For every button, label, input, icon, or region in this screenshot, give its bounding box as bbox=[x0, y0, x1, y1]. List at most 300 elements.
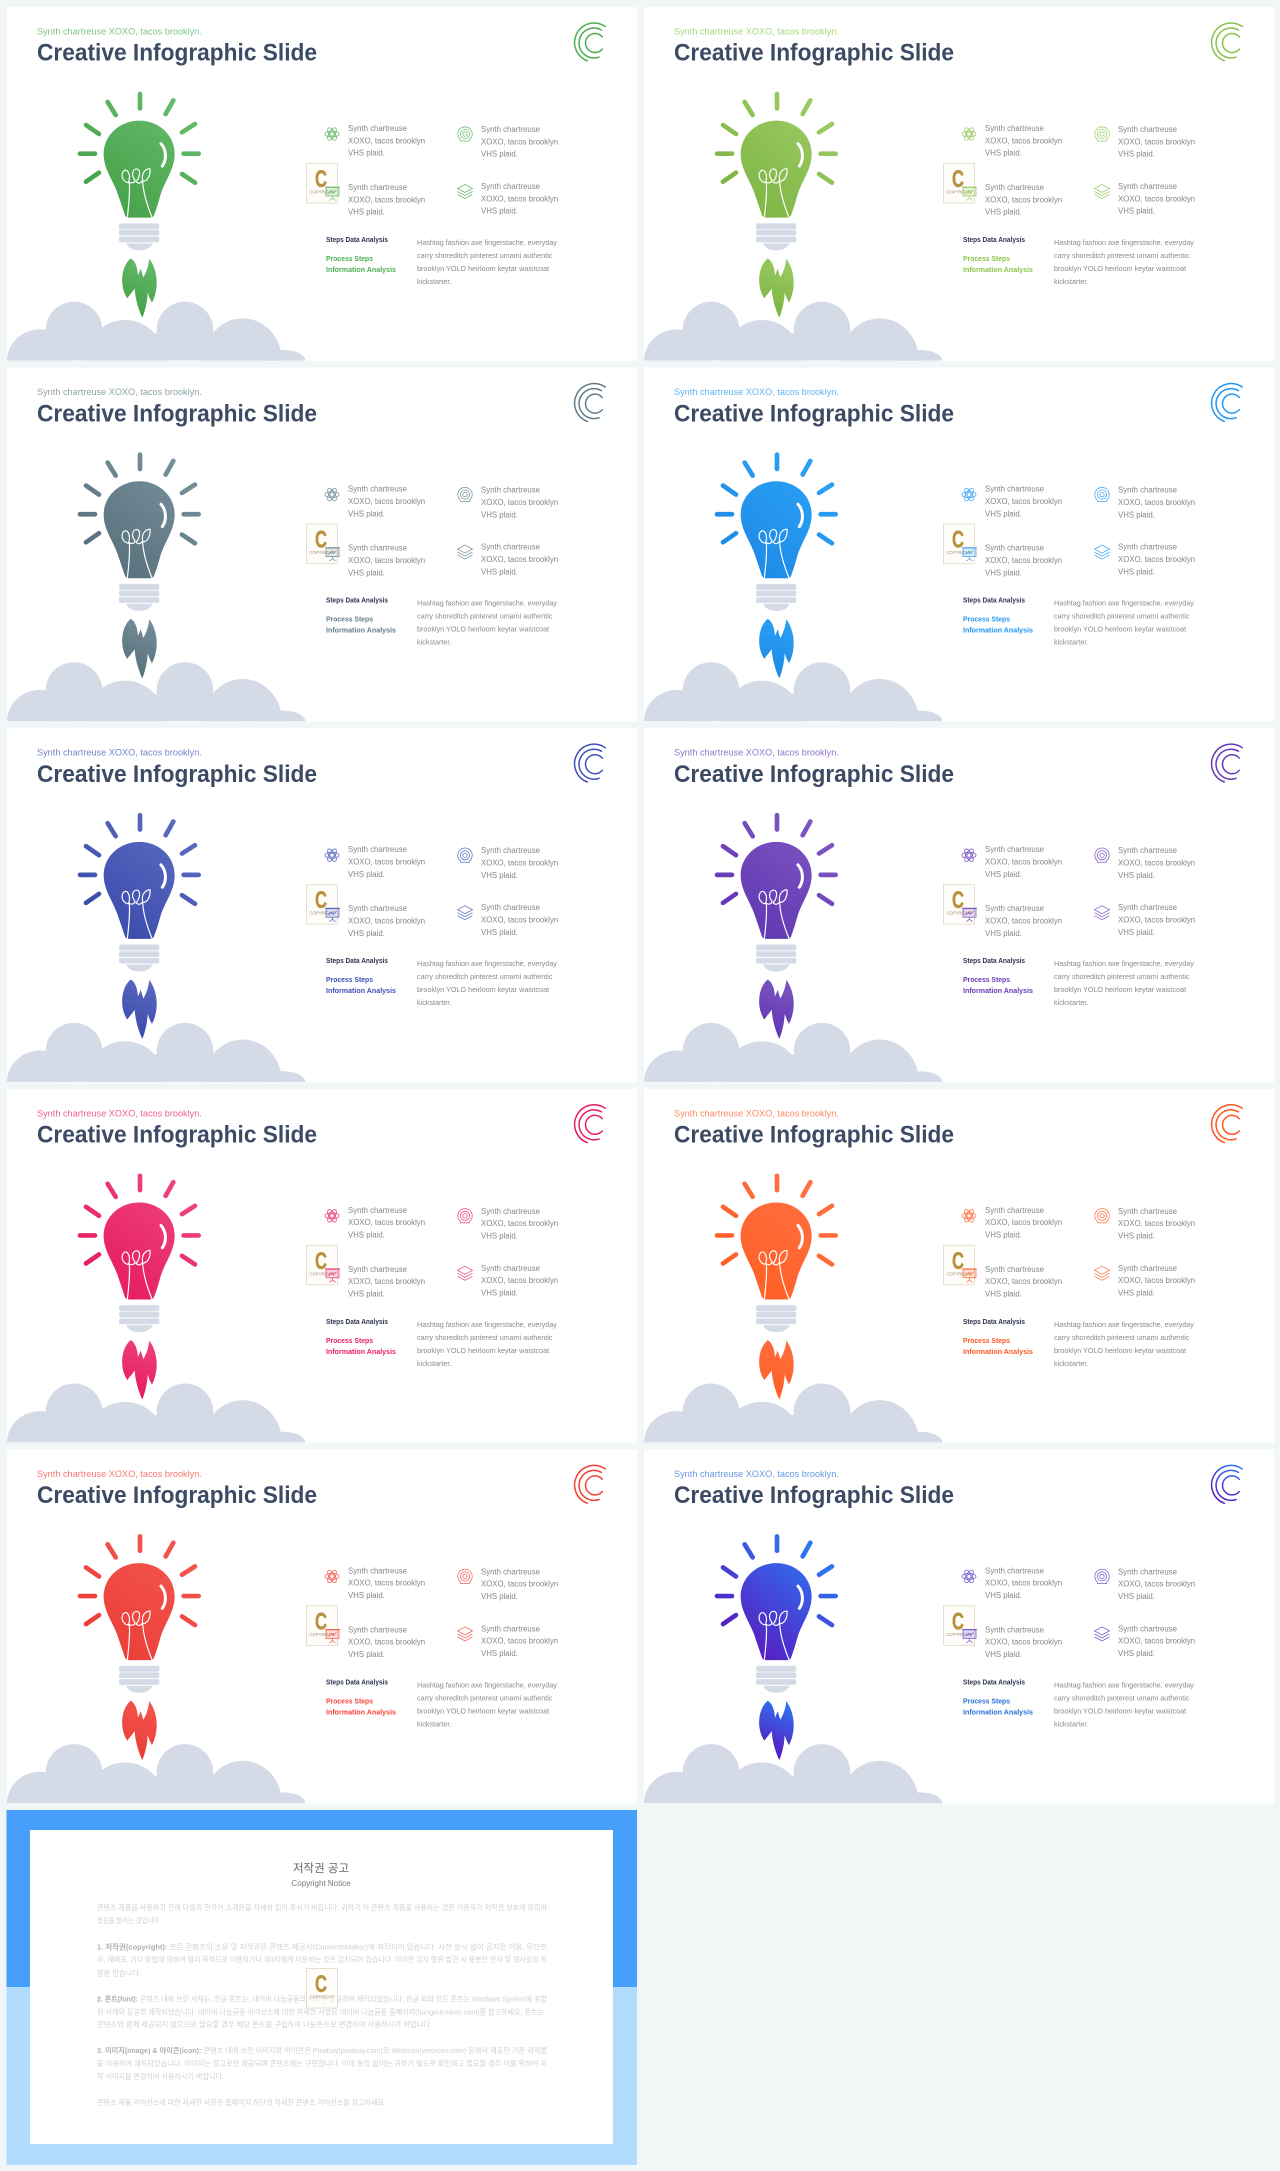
feature text 3: VHS plaid. bbox=[985, 568, 1022, 577]
subtitle: Synth chartreuse XOXO, tacos brooklyn. bbox=[674, 26, 839, 36]
slide 4: blue bbox=[644, 368, 1274, 764]
feature text 4: VHS plaid. bbox=[481, 1289, 518, 1298]
title: Creative Infographic Slide bbox=[37, 1122, 317, 1149]
panel: copyright notice slide bbox=[6, 1810, 637, 2165]
notice closing line: 콘텐츠 제품 라이선스에 대한 자세한 사항은 홈페이지 하단의 자세한 콘텐츠 라이선스를 참고하세요. bbox=[97, 2098, 386, 2107]
rocket light bulb illustration bbox=[7, 94, 305, 403]
feature text 1: Synth chartreuse bbox=[348, 845, 407, 854]
description paragraph: kickstarter. bbox=[417, 1359, 451, 1368]
notice white card bbox=[30, 1830, 613, 2144]
feature text 2: XOXO, tacos brooklyn bbox=[1118, 137, 1195, 146]
feature text 2: VHS plaid. bbox=[481, 871, 518, 880]
description paragraph: brooklyn YOLO heirloom keytar waistcoat bbox=[1054, 1706, 1186, 1715]
icon: layers bbox=[1094, 1266, 1110, 1280]
label: steps data analysis: Steps Data Analysis bbox=[963, 235, 1025, 244]
bulb screw base bbox=[119, 1666, 159, 1693]
notice section 1: copyright bbox=[97, 1942, 547, 1978]
feature text 3: XOXO, tacos brooklyn bbox=[985, 195, 1062, 204]
watermark stamp: COPYRIGHT bbox=[946, 911, 972, 916]
rocket flame bbox=[759, 1340, 794, 1399]
feature text 3: Synth chartreuse bbox=[985, 183, 1044, 192]
description paragraph: carry shoreditch pinterest umami authentic bbox=[1054, 251, 1190, 260]
feature text 2: XOXO, tacos brooklyn bbox=[481, 1219, 558, 1228]
description paragraph: kickstarter. bbox=[1054, 1359, 1088, 1368]
feature text 3: XOXO, tacos brooklyn bbox=[348, 917, 425, 926]
feature text 3: Synth chartreuse bbox=[348, 904, 407, 913]
icon: circular logo bbox=[575, 744, 605, 782]
description paragraph: kickstarter. bbox=[417, 277, 451, 286]
bulb screw base bbox=[119, 1305, 159, 1332]
icon: layers bbox=[1094, 184, 1110, 198]
description paragraph: brooklyn YOLO heirloom keytar waistcoat bbox=[1054, 625, 1186, 634]
filament and highlight bbox=[759, 865, 802, 939]
notice section 3: image and icon: 3. 이미지(image) & 아이콘(icon): 콘텐츠 내에 쓰인 이미지와 아이콘은 Pixabay(pixabay.com)와 Webicon(webicon.com) 등에서 제공한 기준 저작물 bbox=[97, 2046, 547, 2055]
feature text 3: VHS plaid. bbox=[985, 208, 1022, 217]
description paragraph: Hashtag fashion axe fingerstache, everyday bbox=[1054, 238, 1194, 247]
description paragraph: Hashtag fashion axe fingerstache, everyday bbox=[417, 238, 557, 247]
feature text 2: XOXO, tacos brooklyn bbox=[1118, 498, 1195, 507]
smoke cloud bbox=[644, 662, 942, 764]
slide 7: pink bbox=[7, 1089, 637, 1485]
feature text 2: XOXO, tacos brooklyn bbox=[481, 859, 558, 868]
rocket light bulb illustration bbox=[7, 455, 305, 764]
subtitle: Synth chartreuse XOXO, tacos brooklyn. bbox=[37, 1108, 202, 1118]
feature text 4: XOXO, tacos brooklyn bbox=[1118, 1637, 1195, 1646]
label: process steps: Process Steps bbox=[326, 1696, 373, 1705]
icon: atom bbox=[325, 487, 339, 502]
label: process steps: Process Steps bbox=[326, 254, 373, 263]
feature text 3: VHS plaid. bbox=[985, 1650, 1022, 1659]
icon: target bbox=[1095, 1569, 1109, 1583]
title: Creative Infographic Slide bbox=[674, 761, 954, 788]
feature text 4: XOXO, tacos brooklyn bbox=[481, 1276, 558, 1285]
feature text 1: VHS plaid. bbox=[985, 870, 1022, 879]
feature text 1: XOXO, tacos brooklyn bbox=[985, 1579, 1062, 1588]
feature text 3: Synth chartreuse bbox=[985, 904, 1044, 913]
feature text 1: XOXO, tacos brooklyn bbox=[985, 858, 1062, 867]
subtitle: Synth chartreuse XOXO, tacos brooklyn. bbox=[674, 748, 839, 758]
rocket light bulb illustration bbox=[644, 815, 942, 1124]
feature text 4: VHS plaid. bbox=[1118, 567, 1155, 576]
bulb screw base bbox=[756, 584, 796, 611]
feature text 3: VHS plaid. bbox=[985, 929, 1022, 938]
feature text 2: VHS plaid. bbox=[481, 150, 518, 159]
label: process steps: Process Steps bbox=[963, 254, 1010, 263]
title: Creative Infographic Slide bbox=[37, 400, 317, 427]
feature text 3: XOXO, tacos brooklyn bbox=[348, 556, 425, 565]
feature text 1: Synth chartreuse bbox=[348, 1206, 407, 1215]
watermark stamp bbox=[306, 1968, 338, 2008]
notice background bottom band bbox=[6, 1987, 637, 2165]
subtitle: Synth chartreuse XOXO, tacos brooklyn. bbox=[37, 748, 202, 758]
slide 1: green bbox=[7, 7, 637, 403]
icon: circular logo bbox=[575, 1465, 605, 1503]
feature text 4: VHS plaid. bbox=[481, 928, 518, 937]
feature text 3: VHS plaid. bbox=[348, 929, 385, 938]
label: process steps: Process Steps bbox=[963, 615, 1010, 624]
label: steps data analysis: Steps Data Analysis bbox=[963, 956, 1025, 965]
watermark stamp: COPYRIGHT bbox=[946, 550, 972, 555]
slide 6: purple bbox=[644, 728, 1274, 1124]
icon: circular logo bbox=[1212, 744, 1242, 782]
light rays bbox=[717, 1176, 836, 1264]
notice section 2: font: 콘텐츠와 함께 제공되지 않으므로 필요할 경우 해당 폰트를 구입하여 나눔폰트로 변경하여 사용하시기 바랍니다. bbox=[97, 2020, 432, 2029]
smoke cloud bbox=[644, 1744, 942, 1845]
feature text 1: VHS plaid. bbox=[348, 1591, 385, 1600]
feature text 4: Synth chartreuse bbox=[481, 543, 540, 552]
description paragraph: Hashtag fashion axe fingerstache, everyday bbox=[417, 1680, 557, 1689]
description paragraph: Hashtag fashion axe fingerstache, everyday bbox=[1054, 1320, 1194, 1329]
feature text 3: VHS plaid. bbox=[348, 568, 385, 577]
icon: target bbox=[1095, 127, 1109, 141]
label: steps data analysis: Steps Data Analysis bbox=[326, 956, 388, 965]
feature text 4: Synth chartreuse bbox=[481, 1264, 540, 1273]
rocket light bulb illustration bbox=[7, 1176, 305, 1485]
notice intro paragraph: 셨음을 알리는 것입니다. bbox=[97, 1916, 161, 1925]
description paragraph: Hashtag fashion axe fingerstache, everyday bbox=[417, 959, 557, 968]
label: steps data analysis: Steps Data Analysis bbox=[326, 235, 388, 244]
icon: circular logo bbox=[575, 384, 605, 421]
filament and highlight bbox=[759, 504, 802, 578]
light rays bbox=[80, 815, 199, 904]
icon: circular logo bbox=[1212, 1105, 1242, 1143]
description paragraph: kickstarter. bbox=[417, 638, 451, 647]
icon: presentation board bbox=[325, 908, 340, 922]
label: information analysis: Information Analysis bbox=[963, 626, 1033, 635]
feature text 4: VHS plaid. bbox=[481, 1649, 518, 1658]
panel background bbox=[7, 7, 637, 361]
watermark stamp: COPYRIGHT bbox=[946, 1632, 972, 1637]
watermark stamp: COPYRIGHT bbox=[310, 550, 335, 555]
bulb screw base bbox=[756, 223, 796, 250]
description paragraph: Hashtag fashion axe fingerstache, everyday bbox=[1054, 959, 1194, 968]
notice intro paragraph bbox=[97, 1903, 547, 1925]
bulb glass bbox=[104, 1202, 175, 1299]
label: steps data analysis: Steps Data Analysis bbox=[326, 1677, 388, 1686]
feature text 1: Synth chartreuse bbox=[985, 1566, 1044, 1575]
feature text 4: XOXO, tacos brooklyn bbox=[481, 1637, 558, 1646]
feature text 4: VHS plaid. bbox=[1118, 1289, 1155, 1298]
description paragraph: brooklyn YOLO heirloom keytar waistcoat bbox=[1054, 1346, 1186, 1355]
label: process steps: Process Steps bbox=[326, 975, 373, 984]
bulb glass bbox=[104, 481, 175, 578]
notice intro paragraph: 콘텐츠 제품을 사용하기 전에 다음의 한국어 소개문을 자세히 읽어 주시기 바랍니다. 귀하가 이 콘텐츠 제품을 사용하는 것은 이용자가 저작권 보호에 유의하 bbox=[97, 1903, 547, 1912]
feature text 3: Synth chartreuse bbox=[985, 1265, 1044, 1274]
feature text 4: XOXO, tacos brooklyn bbox=[481, 555, 558, 564]
feature text 4: Synth chartreuse bbox=[481, 903, 540, 912]
filament and highlight bbox=[122, 1586, 165, 1660]
feature text 2: Synth chartreuse bbox=[1118, 846, 1177, 855]
filament and highlight bbox=[122, 504, 165, 578]
feature text 3: XOXO, tacos brooklyn bbox=[348, 1638, 425, 1647]
icon: presentation board bbox=[962, 187, 977, 200]
label: process steps: Process Steps bbox=[963, 1696, 1010, 1705]
icon: target bbox=[458, 1209, 472, 1223]
title: Creative Infographic Slide bbox=[37, 40, 317, 67]
light rays bbox=[80, 1536, 199, 1625]
panel background bbox=[7, 728, 637, 1082]
description paragraph: brooklyn YOLO heirloom keytar waistcoat bbox=[1054, 985, 1186, 994]
feature text 1: VHS plaid. bbox=[985, 1591, 1022, 1600]
notice subheading: Copyright Notice bbox=[291, 1879, 351, 1888]
title: Creative Infographic Slide bbox=[674, 1122, 954, 1149]
description paragraph: carry shoreditch pinterest umami authentic bbox=[417, 251, 553, 260]
subtitle: Synth chartreuse XOXO, tacos brooklyn. bbox=[37, 26, 202, 36]
rocket light bulb illustration bbox=[644, 1536, 942, 1845]
subtitle: Synth chartreuse XOXO, tacos brooklyn. bbox=[674, 1108, 839, 1118]
feature text 4: Synth chartreuse bbox=[1118, 543, 1177, 552]
label: information analysis: Information Analysis bbox=[963, 986, 1033, 995]
bulb screw base bbox=[756, 945, 796, 972]
notice section 2: font bbox=[97, 1994, 547, 2029]
panel background bbox=[7, 1089, 637, 1443]
watermark stamp: COPYRIGHT bbox=[310, 190, 335, 194]
bulb screw base bbox=[756, 1305, 796, 1332]
smoke cloud bbox=[7, 302, 305, 403]
rocket flame bbox=[759, 258, 794, 318]
description paragraph: brooklyn YOLO heirloom keytar waistcoat bbox=[417, 985, 549, 994]
feature text 2: VHS plaid. bbox=[1118, 150, 1155, 159]
icon: layers bbox=[1094, 1627, 1110, 1641]
rocket flame bbox=[122, 1701, 157, 1760]
panel background bbox=[7, 1449, 637, 1803]
description paragraph: brooklyn YOLO heirloom keytar waistcoat bbox=[417, 1346, 549, 1355]
subtitle: Synth chartreuse XOXO, tacos brooklyn. bbox=[674, 387, 839, 397]
label: information analysis: Information Analysis bbox=[326, 1347, 396, 1356]
subtitle: Synth chartreuse XOXO, tacos brooklyn. bbox=[674, 1469, 839, 1479]
feature text 3: VHS plaid. bbox=[985, 1290, 1022, 1299]
light rays bbox=[717, 455, 836, 543]
description paragraph: carry shoreditch pinterest umami authentic bbox=[417, 972, 553, 981]
label: process steps: Process Steps bbox=[963, 1336, 1010, 1345]
feature text 2: VHS plaid. bbox=[481, 510, 518, 519]
slide 2: light green bbox=[644, 7, 1274, 403]
label: information analysis: Information Analysis bbox=[326, 986, 396, 995]
description paragraph: kickstarter. bbox=[1054, 1719, 1088, 1728]
icon: circular logo bbox=[1212, 1465, 1242, 1503]
description paragraph: Hashtag fashion axe fingerstache, everyday bbox=[417, 1320, 557, 1329]
feature text 2: Synth chartreuse bbox=[481, 1207, 540, 1216]
feature text 2: VHS plaid. bbox=[1118, 871, 1155, 880]
label: process steps: Process Steps bbox=[326, 1336, 373, 1345]
bulb glass bbox=[104, 121, 175, 218]
icon: presentation board bbox=[962, 1269, 977, 1282]
feature text 1: XOXO, tacos brooklyn bbox=[348, 1579, 425, 1588]
notice section 2: font: 2. 폰트(font): 콘텐츠 내에 쓰인 서체는, 한글 폰트는, 네이버 나눔글꼴의 서체를 활용하여 제작되었습니다. 한글 외의 모든 폰트는 Windows System에 포함 bbox=[97, 1994, 547, 2004]
watermark stamp: C bbox=[952, 166, 964, 193]
feature text 4: XOXO, tacos brooklyn bbox=[481, 194, 558, 203]
feature text 3: XOXO, tacos brooklyn bbox=[985, 1277, 1062, 1286]
bulb glass bbox=[741, 842, 812, 939]
feature text 4: XOXO, tacos brooklyn bbox=[1118, 555, 1195, 564]
icon: presentation board bbox=[962, 908, 977, 922]
bulb glass bbox=[741, 1563, 812, 1660]
panel background bbox=[644, 368, 1274, 722]
watermark stamp bbox=[306, 885, 338, 924]
smoke cloud bbox=[644, 302, 942, 403]
watermark stamp: C bbox=[315, 1248, 327, 1275]
icon: target bbox=[458, 487, 472, 502]
feature text 4: Synth chartreuse bbox=[1118, 182, 1177, 191]
feature text 4: Synth chartreuse bbox=[481, 182, 540, 191]
watermark stamp bbox=[944, 1606, 974, 1645]
description paragraph: Hashtag fashion axe fingerstache, everyday bbox=[417, 599, 557, 608]
bulb glass bbox=[104, 842, 175, 939]
feature text 3: VHS plaid. bbox=[348, 1290, 385, 1299]
icon: layers bbox=[1094, 545, 1110, 559]
feature text 2: VHS plaid. bbox=[1118, 1232, 1155, 1241]
feature text 4: VHS plaid. bbox=[1118, 928, 1155, 937]
rocket flame bbox=[122, 619, 157, 678]
smoke cloud bbox=[644, 1023, 942, 1124]
feature text 2: Synth chartreuse bbox=[481, 846, 540, 855]
icon: circular logo bbox=[1212, 384, 1242, 421]
feature text 2: Synth chartreuse bbox=[481, 1567, 540, 1576]
feature text 1: VHS plaid. bbox=[348, 870, 385, 879]
feature text 2: XOXO, tacos brooklyn bbox=[1118, 1580, 1195, 1589]
feature text 3: Synth chartreuse bbox=[348, 1625, 407, 1634]
feature text 2: XOXO, tacos brooklyn bbox=[1118, 859, 1195, 868]
icon: circular logo bbox=[1212, 23, 1242, 61]
bulb glass bbox=[741, 121, 812, 218]
label: steps data analysis: Steps Data Analysis bbox=[963, 1677, 1025, 1686]
bulb glass bbox=[104, 1563, 175, 1660]
light rays bbox=[717, 815, 836, 904]
icon: atom bbox=[962, 487, 976, 502]
filament and highlight bbox=[759, 1225, 802, 1299]
feature text 1: Synth chartreuse bbox=[348, 485, 407, 494]
icon: layers bbox=[458, 545, 472, 559]
light rays bbox=[80, 455, 199, 543]
feature text 3: XOXO, tacos brooklyn bbox=[348, 1277, 425, 1286]
rocket flame bbox=[122, 258, 157, 318]
icon: atom bbox=[962, 1569, 976, 1584]
notice section 1: copyright: 사, 재배포, 기타 방법에 의하여 영리 목적으로 이용하거나 제3자에게 이용하는 것은 금지되어 있습니다. 이러한 금지 행위 발견 시 충분한 민사 및 형사상의 처 bbox=[97, 1955, 547, 1964]
rocket flame bbox=[759, 619, 794, 678]
icon: layers bbox=[458, 906, 472, 920]
description paragraph: carry shoreditch pinterest umami authentic bbox=[417, 1333, 553, 1342]
feature text 2: XOXO, tacos brooklyn bbox=[481, 1580, 558, 1589]
feature text 2: VHS plaid. bbox=[1118, 510, 1155, 519]
title: Creative Infographic Slide bbox=[37, 1482, 317, 1509]
watermark stamp bbox=[944, 164, 974, 203]
feature text 4: Synth chartreuse bbox=[1118, 903, 1177, 912]
feature text 1: XOXO, tacos brooklyn bbox=[348, 136, 425, 145]
icon: atom bbox=[962, 126, 976, 142]
feature text 4: VHS plaid. bbox=[1118, 207, 1155, 216]
watermark stamp: C bbox=[952, 887, 964, 914]
feature text 4: Synth chartreuse bbox=[1118, 1624, 1177, 1633]
feature text 1: VHS plaid. bbox=[348, 1231, 385, 1240]
subtitle: Synth chartreuse XOXO, tacos brooklyn. bbox=[37, 1469, 202, 1479]
watermark stamp: COPYRIGHT bbox=[310, 911, 335, 916]
feature text 3: Synth chartreuse bbox=[985, 1625, 1044, 1634]
rocket light bulb illustration bbox=[7, 1536, 305, 1845]
watermark stamp: C bbox=[315, 527, 327, 554]
watermark stamp: C bbox=[315, 166, 327, 193]
panel background bbox=[644, 728, 1274, 1082]
watermark stamp bbox=[944, 524, 974, 564]
description paragraph: carry shoreditch pinterest umami authentic bbox=[1054, 1333, 1190, 1342]
filament and highlight bbox=[122, 865, 165, 939]
watermark stamp: COPYRIGHT bbox=[310, 1994, 335, 2000]
feature text 4: XOXO, tacos brooklyn bbox=[1118, 916, 1195, 925]
panel background bbox=[7, 368, 637, 722]
feature text 1: Synth chartreuse bbox=[348, 124, 407, 133]
light rays bbox=[717, 94, 836, 183]
feature text 3: VHS plaid. bbox=[348, 1650, 385, 1659]
rocket flame bbox=[122, 1340, 157, 1399]
feature text 3: Synth chartreuse bbox=[348, 544, 407, 553]
watermark stamp bbox=[306, 1245, 338, 1285]
subtitle: Synth chartreuse XOXO, tacos brooklyn. bbox=[37, 387, 202, 397]
icon: atom bbox=[325, 1569, 339, 1584]
icon: presentation board bbox=[325, 1269, 340, 1282]
description paragraph: kickstarter. bbox=[1054, 277, 1088, 286]
icon: atom bbox=[962, 1208, 976, 1223]
label: information analysis: Information Analysis bbox=[963, 1347, 1033, 1356]
description paragraph: brooklyn YOLO heirloom keytar waistcoat bbox=[417, 264, 549, 273]
watermark stamp: C bbox=[952, 1248, 964, 1275]
feature text 2: Synth chartreuse bbox=[1118, 125, 1177, 134]
icon: target bbox=[1095, 848, 1109, 862]
feature text 1: VHS plaid. bbox=[348, 149, 385, 158]
notice section 1: copyright: 1. 저작권(copyright): 모든 콘텐츠의 소유 및 저작권은 콘텐츠 제공사(ContentsMaker)에 저작되어 있습니다. 사전 승낙 없이 금지된 이용, 무단전 bbox=[97, 1942, 547, 1952]
bulb glass bbox=[741, 481, 812, 578]
feature text 2: VHS plaid. bbox=[481, 1592, 518, 1601]
description paragraph: kickstarter. bbox=[417, 998, 451, 1007]
label: information analysis: Information Analysis bbox=[963, 1707, 1033, 1716]
feature text 2: VHS plaid. bbox=[1118, 1592, 1155, 1601]
slide 10: blue to violet gradient bbox=[644, 1449, 1274, 1845]
watermark stamp bbox=[944, 1245, 974, 1285]
notice background top band bbox=[6, 1810, 637, 1987]
feature text 4: XOXO, tacos brooklyn bbox=[1118, 1276, 1195, 1285]
feature text 3: XOXO, tacos brooklyn bbox=[985, 1638, 1062, 1647]
filament and highlight bbox=[122, 144, 165, 217]
notice section 2: font: 된 서체와 동일한 제작되었습니다. 네이버 나눔글꼴 라이선스에 대한 자세한 사항은 네이버 나눔글꼴 홈페이지(hangeul.naver.com)를 참고하세요. 폰트는 bbox=[97, 2008, 544, 2016]
light rays bbox=[80, 94, 199, 183]
rocket light bulb illustration bbox=[644, 455, 942, 764]
feature text 3: Synth chartreuse bbox=[348, 1265, 407, 1274]
icon: layers bbox=[458, 1627, 472, 1641]
slide 5: indigo bbox=[7, 728, 637, 1124]
bulb glass bbox=[741, 1202, 812, 1299]
description paragraph: brooklyn YOLO heirloom keytar waistcoat bbox=[1054, 264, 1186, 273]
feature text 1: XOXO, tacos brooklyn bbox=[985, 1218, 1062, 1227]
feature text 4: XOXO, tacos brooklyn bbox=[1118, 194, 1195, 203]
notice heading: 저작권 공고 bbox=[293, 1862, 349, 1875]
description paragraph: kickstarter. bbox=[417, 1719, 451, 1728]
feature text 1: VHS plaid. bbox=[985, 1231, 1022, 1240]
feature text 2: VHS plaid. bbox=[481, 1232, 518, 1241]
watermark stamp: C bbox=[315, 887, 327, 914]
icon: layers bbox=[458, 1266, 472, 1280]
label: steps data analysis: Steps Data Analysis bbox=[326, 1317, 388, 1326]
smoke cloud bbox=[644, 1383, 942, 1485]
icon: target bbox=[458, 1569, 472, 1583]
bulb screw base bbox=[119, 945, 159, 972]
filament and highlight bbox=[759, 1586, 802, 1660]
feature text 1: Synth chartreuse bbox=[985, 485, 1044, 494]
feature text 4: VHS plaid. bbox=[481, 567, 518, 576]
feature text 2: Synth chartreuse bbox=[1118, 1567, 1177, 1576]
feature text 3: XOXO, tacos brooklyn bbox=[985, 556, 1062, 565]
label: process steps: Process Steps bbox=[326, 615, 373, 624]
icon: target bbox=[1095, 1209, 1109, 1223]
panel background bbox=[644, 1449, 1274, 1803]
label: information analysis: Information Analysis bbox=[963, 265, 1033, 274]
